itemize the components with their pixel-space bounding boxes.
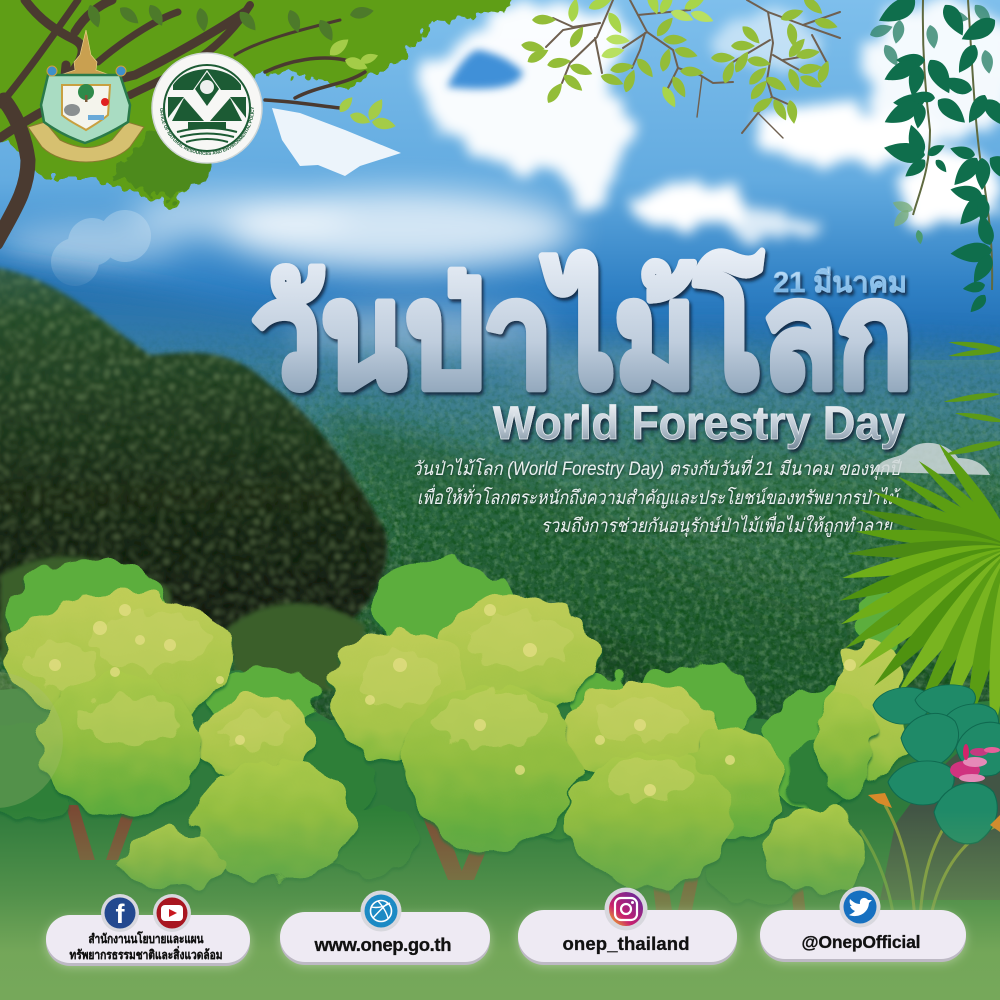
mountain forest background xyxy=(0,246,1000,720)
foreground cartoon trees xyxy=(0,559,1000,1000)
contact pill: instagram xyxy=(518,888,737,965)
branches xyxy=(0,0,365,243)
sky background xyxy=(0,0,1000,360)
yellow green crowns xyxy=(5,594,908,786)
lower haze clouds xyxy=(0,190,575,270)
light leaves xyxy=(326,35,397,131)
clouds xyxy=(420,0,1000,237)
orange flowers xyxy=(868,793,1000,832)
fan leaves xyxy=(836,439,1000,743)
green shapes xyxy=(173,69,241,90)
distant ridges xyxy=(320,410,1000,820)
mid green crowns xyxy=(38,675,875,894)
office name: ทรัพยากรธรรมชาติและสิ่งแวดล้อม xyxy=(70,946,222,962)
shield xyxy=(41,75,130,143)
bird shaped pale cloud xyxy=(272,108,401,176)
description paragraph: เพื่อให้ทั่วโลกตระหนักถึงความสำคัญและประโยชน์ของทรัพยากรป่าไม้ xyxy=(417,484,901,509)
dark left hill xyxy=(0,264,390,654)
round office logo xyxy=(151,52,263,164)
description paragraph: วันป่าไม้โลก (World Forestry Day) ตรงกับวันที่ 21 มีนาคม ของทุกปี xyxy=(412,455,903,480)
twitter icon xyxy=(840,886,880,928)
dark shade behind plant xyxy=(880,725,1000,900)
vine leaves xyxy=(875,0,1000,316)
contact pill: twitter xyxy=(760,886,966,962)
description paragraph xyxy=(412,455,903,537)
tropical plant lower right xyxy=(860,685,1000,925)
small round clouds xyxy=(51,210,151,286)
tree emblem xyxy=(78,84,94,100)
outer disc xyxy=(152,53,262,163)
ribbon xyxy=(28,122,144,162)
leaves xyxy=(520,0,839,125)
curved rim text xyxy=(160,108,254,155)
instagram icon xyxy=(604,888,648,930)
office name xyxy=(70,931,222,962)
youtube icon xyxy=(153,894,191,932)
back tree crowns xyxy=(8,559,902,810)
low sunlit shrubs under hill xyxy=(0,556,365,690)
stems xyxy=(860,805,1000,925)
office name: สำนักงานนโยบายและแผน xyxy=(88,931,204,946)
title english: World Forestry Day xyxy=(493,396,905,449)
website text: www.onep.go.th xyxy=(314,934,452,955)
pink flower xyxy=(950,744,1000,782)
palm fronds right xyxy=(836,339,1000,743)
top center branches with leaves xyxy=(520,0,840,138)
description paragraph: รวมถึงการช่วยกันอนุรักษ์ป่าไม้เพื่อไม่ให้ถูกทำลาย xyxy=(541,512,894,537)
contact pill: website xyxy=(280,890,490,965)
globes xyxy=(47,66,57,76)
twigs xyxy=(546,0,840,138)
spire xyxy=(60,30,110,75)
globe icon xyxy=(360,890,402,932)
top left tree xyxy=(0,0,525,243)
contact pill: office xyxy=(46,894,250,966)
red sun xyxy=(101,98,109,106)
date text: 21 มีนาคม xyxy=(773,267,907,299)
teal leaves xyxy=(873,685,1000,844)
facebook icon xyxy=(101,894,139,932)
inner shield xyxy=(62,85,110,130)
mist over the slope xyxy=(290,306,740,388)
canopy xyxy=(0,0,525,205)
water xyxy=(88,115,104,120)
vine stems xyxy=(913,0,992,290)
water waves xyxy=(177,128,237,142)
bottom green fade xyxy=(0,810,1000,1000)
pale haze at left edge xyxy=(0,672,63,808)
dark canopy leaves xyxy=(85,2,375,43)
elephant xyxy=(64,104,80,116)
forest speckle xyxy=(0,341,1000,720)
crown light spots xyxy=(49,604,856,796)
ground green xyxy=(0,670,1000,1000)
dark canopy leaves top xyxy=(868,1,995,75)
small white cloud right xyxy=(875,443,990,475)
upper thin fronds xyxy=(943,339,1000,458)
dark under crowns xyxy=(0,720,850,905)
blue sky gap xyxy=(447,50,523,89)
instagram handle: onep_thailand xyxy=(562,933,690,954)
hanging vines right xyxy=(868,0,1000,316)
crown inner highlights xyxy=(25,612,695,800)
twitter handle: @OnepOfficial xyxy=(802,932,920,952)
facebook icon: f xyxy=(116,899,126,929)
emblem crest xyxy=(28,30,144,162)
trunks xyxy=(66,805,806,915)
